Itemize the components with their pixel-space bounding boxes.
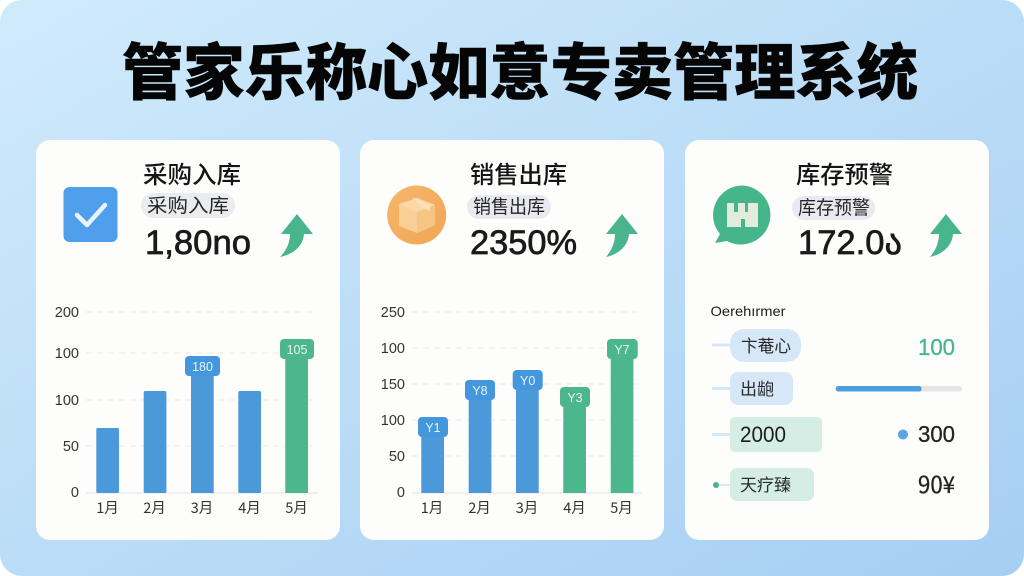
bar chart: purchases: 0 xyxy=(71,485,79,501)
row 3: 300 xyxy=(918,421,955,447)
tag: sales outbound: 销售出库 xyxy=(473,192,545,219)
bar chart: sales: 50 xyxy=(389,449,405,465)
metric value: 172.0ა xyxy=(798,224,902,262)
bar chart: sales: 1月 xyxy=(421,497,443,518)
row 3 xyxy=(712,417,955,452)
bar chart: sales: 250 xyxy=(381,305,405,321)
bar chart: sales: 0 xyxy=(397,485,405,501)
row 4 xyxy=(713,466,955,501)
bar chart: purchases: 105 xyxy=(287,343,307,357)
bar chart: purchases: 1月 xyxy=(96,497,119,518)
title: 管家乐称心如意专卖管理系统 xyxy=(122,23,918,112)
bar chart: purchases: 5月 xyxy=(285,497,308,518)
row 1: 卞菴心 xyxy=(741,332,791,357)
row 4: 90¥ xyxy=(918,466,955,500)
icon: blue checkbox xyxy=(64,187,118,242)
bar chart: sales: 5月 xyxy=(610,497,633,518)
icon: trend arrow xyxy=(280,214,313,257)
icon: green warehouse bubble xyxy=(713,186,770,244)
panel: purchase inbound xyxy=(36,140,340,540)
icon: trend arrow xyxy=(606,214,638,257)
tag: purchase inbound: 采购入库 xyxy=(147,191,229,218)
metric value: 1,80no xyxy=(145,224,251,262)
heading: stock alerts: 库存预警 xyxy=(796,155,893,190)
row 1 xyxy=(712,329,955,362)
bar chart: sales: 100 xyxy=(381,341,405,357)
bar chart: sales: 150 xyxy=(381,377,405,393)
metric value: 2350% xyxy=(470,224,577,262)
bar chart: purchases: 100 xyxy=(55,346,79,362)
panel: stock alerts xyxy=(685,140,989,540)
row 1: 100 xyxy=(918,334,955,360)
bar chart: purchases: 100 xyxy=(55,393,79,409)
row 2 with progress bar: 出龅 xyxy=(740,375,774,400)
bar chart: sales: Y7 xyxy=(614,343,630,357)
bar chart: sales: 100 xyxy=(381,413,405,429)
heading: sales outbound: 销售出库 xyxy=(470,155,567,190)
bar chart: sales: Y3 xyxy=(567,391,583,405)
row 4: 天疗臻 xyxy=(740,471,791,496)
bar chart: purchases xyxy=(55,305,318,518)
bar chart: sales: 4月 xyxy=(563,497,586,518)
icon: trend arrow xyxy=(930,214,962,257)
bar chart: sales: Y8 xyxy=(472,384,488,398)
row 3: 2000 xyxy=(740,422,786,447)
bar chart: purchases: 50 xyxy=(63,439,79,455)
bar chart: sales: 2月 xyxy=(468,497,491,518)
tag: stock alerts: 库存预警 xyxy=(798,193,870,220)
panel: sales outbound xyxy=(360,140,664,540)
bar chart: purchases: 3月 xyxy=(191,497,213,518)
row 2 with progress bar xyxy=(712,372,962,405)
bar chart: sales: 3月 xyxy=(516,497,538,518)
bar chart: sales xyxy=(381,305,642,518)
bar chart: sales: Y1 xyxy=(425,421,441,435)
bar chart: purchases: 180 xyxy=(192,360,213,374)
list heading: Oerehırmer xyxy=(710,303,786,319)
heading: purchase inbound: 采购入库 xyxy=(143,155,241,190)
bar chart: sales: Y0 xyxy=(520,374,535,388)
bar chart: purchases: 200 xyxy=(55,305,79,321)
bar chart: purchases: 4月 xyxy=(238,497,261,518)
icon: orange parcel xyxy=(387,186,446,244)
bar chart: purchases: 2月 xyxy=(143,497,166,518)
